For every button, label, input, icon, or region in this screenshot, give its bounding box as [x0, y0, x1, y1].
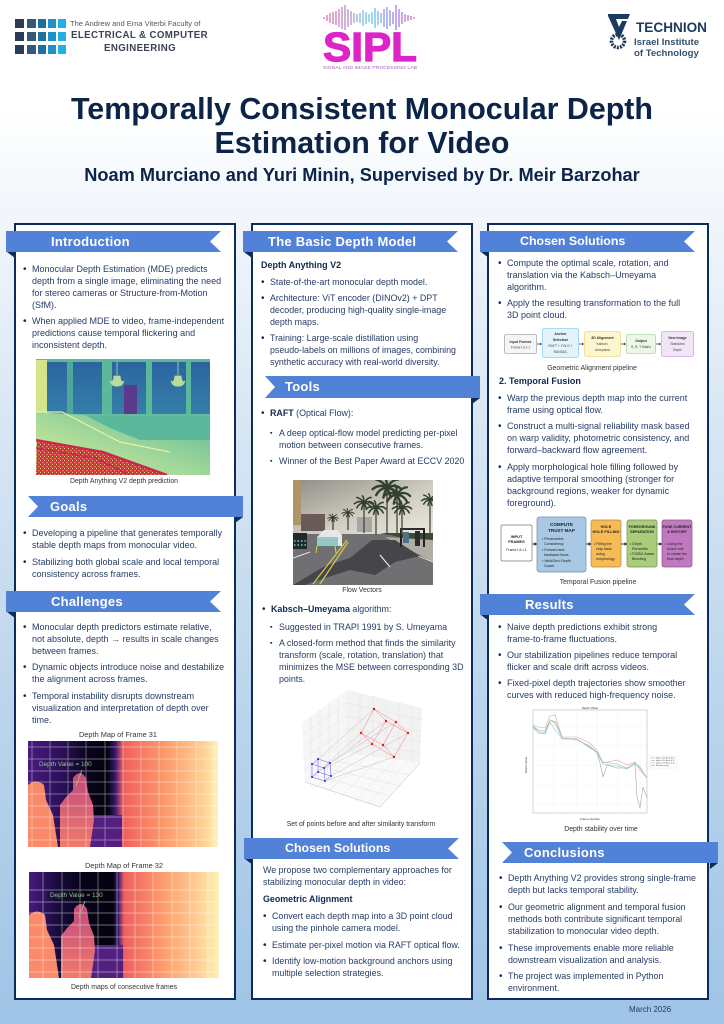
text: depth anything bullet 3: pseudo-labels on millions of images, combining	[270, 345, 456, 355]
caption: frame 32: Depth Map of Frame 32	[85, 861, 163, 870]
heading: conclusions: Conclusions	[524, 845, 605, 860]
diagram: temporal fusion pipeline: TRUST MAP	[548, 528, 575, 533]
image: depth anything prediction	[36, 359, 210, 475]
text: alignment bullet 1: Compute the optimal scale, rotation, and	[507, 258, 669, 268]
text: geometric alignment bullet 1	[272, 911, 453, 935]
diagram: temporal fusion pipeline: map back	[596, 547, 612, 551]
diagram: temporal fusion pipeline: • Valid/Zero Depth	[542, 559, 571, 563]
text: kabsch sub-bullet 2: A closed-form method that finds the similarity	[279, 638, 456, 648]
logo: electrical and computer engineering faculty	[15, 19, 208, 54]
fold: chosen solutions middle ribbon	[245, 859, 251, 864]
diagram: geometric alignment pipeline: Anchor	[554, 332, 567, 336]
text: raft sub-bullet 1: A deep optical-flow model predicting per-pixel	[279, 428, 458, 438]
logo: Technion: Israel Institute	[634, 37, 699, 48]
diagram: geometric alignment pipeline: Kabsch-	[596, 342, 609, 346]
caption: temporal fusion pipeline: Temporal Fusion pipeline	[560, 579, 636, 586]
text: challenges bullet 3	[32, 691, 209, 727]
diagram: temporal fusion pipeline: • Filling the	[594, 542, 612, 546]
text: results bullet 2: flicker and scale drift across videos.	[507, 662, 649, 672]
text: introduction bullet 1: for stereo cameras or Structure-from-Motion	[32, 288, 208, 298]
text: introduction bullet 2: predictions cause temporal flickering and	[32, 328, 195, 338]
text: conclusions bullet 2: methods both contribute significant temporal	[508, 914, 682, 924]
caption: depth stability: Depth stability over time	[564, 826, 638, 833]
text: challenges bullet 2: Dynamic objects introduce noise and destabilize	[32, 662, 224, 672]
text: temporal fusion bullet 3: foreground).	[507, 498, 556, 508]
fold: goals ribbon	[236, 517, 243, 522]
fold: introduction ribbon	[7, 252, 14, 258]
text: depth anything bullet 2	[270, 293, 446, 329]
diagram: geometric alignment pipeline: S, R, T Matrix	[631, 345, 651, 349]
text: kabsch sub-bullet 2	[279, 638, 464, 686]
heading: chosen solutions right	[480, 231, 695, 252]
text: goals bullet 2: consistency across frames.	[32, 569, 141, 579]
chart: depth stability line chart	[524, 706, 678, 821]
text: geometric alignment bullet 2: Estimate per-pixel motion via RAFT optical flow.	[272, 940, 460, 950]
text: geometric alignment bullet 1: Convert each depth map into a 3D point cloud	[272, 911, 453, 921]
heading: goals	[28, 496, 243, 517]
heading: the basic depth model: The Basic Depth Model	[268, 234, 416, 249]
text: challenges bullet 3: Temporal instability disrupts downstream	[32, 691, 194, 701]
diagram: temporal fusion pipeline: INPUT	[511, 534, 523, 539]
heading: tools	[265, 376, 480, 398]
text: kabsch sub-bullet 2: minimizes the MSE between corresponding 3D	[279, 662, 464, 672]
text: conclusions bullet 1	[508, 873, 696, 897]
text: depth anything bullet 3	[270, 333, 456, 369]
text: chosen solutions intro: We propose two complementary approaches for	[263, 865, 452, 875]
title: Temporally Consistent Monocular Depth	[71, 92, 653, 126]
diagram: geometric alignment pipeline: RAFT + YOLO +	[548, 344, 573, 348]
text: temporal fusion bullet 1	[507, 393, 687, 417]
text: geometric alignment bullet 3	[272, 956, 453, 980]
diagram: temporal fusion pipeline: backward flows	[544, 553, 569, 557]
text: conclusions bullet 2	[508, 902, 686, 938]
image: depth map of frame 32	[29, 872, 219, 978]
text: depth anything bullet 2: Architecture: ViT encoder (DINOv2) + DPT	[270, 293, 438, 303]
text: conclusions bullet 3: These improvements enable more reliable	[508, 943, 674, 953]
logo: SIPL signal and image processing lab	[323, 5, 417, 70]
text: chosen solutions intro	[263, 865, 452, 887]
text: results bullet 3: Fixed-pixel depth trajectories show smoother	[507, 678, 686, 688]
caption: depth anything: Depth Anything V2 depth prediction	[70, 478, 178, 485]
text: depth anything bullet 2: decoder, producing high-quality single-image	[270, 305, 446, 315]
image: street scene with flow vectors	[293, 480, 433, 585]
subheading: depth anything v2: Depth Anything V2	[261, 260, 341, 270]
diagram: temporal fusion pipeline: FOREGROUND	[629, 525, 656, 529]
text: geometric alignment bullet 3: Identify low-motion background anchors using	[272, 956, 453, 966]
text: alignment bullet 2	[507, 298, 680, 322]
text: conclusions bullet 2: Our geometric alignment and temporal fusion	[508, 902, 686, 912]
text: results bullet 1: Naive depth predictions exhibit strong	[507, 622, 657, 632]
logo: electrical and computer engineering faculty: ELECTRICAL & COMPUTER	[71, 30, 208, 41]
diagram: geometric alignment pipeline: Output	[635, 339, 648, 343]
diagram: temporal fusion pipeline: • Forward and	[542, 548, 564, 552]
text: alignment bullet 1: algorithm.	[507, 282, 547, 292]
diagram: temporal fusion pipeline: Guard	[544, 564, 554, 568]
authors: Noam Murciano and Yuri Minin, Supervised by Dr. Meir Barzohar	[84, 165, 640, 185]
heading: the basic depth model	[243, 231, 458, 252]
text: conclusions bullet 4: environment.	[508, 983, 559, 993]
heading: chosen solutions middle	[244, 838, 459, 859]
diagram: temporal fusion pipeline: to create the	[667, 552, 687, 556]
heading: goals: Goals	[50, 499, 87, 514]
text: raft sub-bullet 1: motion between consecutive frames.	[279, 440, 423, 450]
logo: electrical and computer engineering faculty: ENGINEERING	[104, 43, 176, 54]
fold: challenges ribbon	[7, 612, 14, 618]
caption: flow vectors: Flow Vectors	[342, 587, 382, 594]
text: results bullet 3	[507, 678, 686, 702]
text: kabsch sub-bullet 2: points.	[279, 674, 305, 684]
title: Estimation for Video	[215, 126, 509, 160]
text: alignment bullet 1	[507, 258, 669, 294]
diagram: temporal fusion pipeline: Blending	[632, 557, 646, 561]
heading: conclusions	[502, 842, 718, 863]
text: temporal fusion bullet 2	[507, 421, 690, 457]
text: conclusions bullet 2: stabilization to monocular video depth.	[508, 926, 659, 936]
text: alignment bullet 2: 3D point cloud.	[507, 310, 567, 320]
text: temporal fusion bullet 2: Construct a multi-signal reliability mask based	[507, 421, 690, 431]
panel: middle column	[251, 223, 473, 1000]
chart: depth stability line chart: Depth Value	[524, 757, 528, 773]
text: challenges bullet 2: the alignment across frames.	[32, 674, 148, 684]
diagram: temporal fusion pipeline: FRAMES	[508, 539, 525, 544]
text: goals bullet 1	[32, 528, 222, 552]
fold: basic depth model ribbon	[244, 252, 251, 258]
text: depth anything bullet 2: depth maps.	[270, 317, 319, 327]
fold: results ribbon	[481, 615, 487, 620]
diagram: temporal fusion pipeline: Percentile	[632, 547, 648, 551]
logo: SIPL signal and image processing lab: SIPL	[323, 24, 417, 70]
text: depth anything bullet 3: synthetic accuracy with real-world diversity.	[270, 357, 440, 367]
diagram: geometric alignment pipeline: Input Frames	[510, 340, 532, 344]
text: challenges bullet 1: not absolute, depth → results in scale changes	[32, 634, 219, 644]
text: introduction bullet 2: When applied MDE to video, frame-independent	[32, 316, 224, 326]
diagram: geometric alignment pipeline	[504, 328, 694, 358]
text: results bullet 1: frame-to-frame fluctuations.	[507, 634, 617, 644]
text: conclusions bullet 4: The project was implemented in Python	[508, 971, 663, 981]
heading: results: Results	[525, 597, 574, 612]
diagram: temporal fusion pipeline: Frame t & t-1	[506, 548, 527, 552]
panel: right column	[487, 223, 709, 1000]
diagram: temporal fusion pipeline: morphology	[596, 557, 615, 561]
text: chosen solutions intro: stabilizing monocular depth in video:	[263, 877, 406, 887]
text: kabsch sub-bullet 2: transform (scale, rotation, translation) that	[279, 650, 443, 660]
text: challenges bullet 1: Monocular depth predictors estimate relative,	[32, 622, 212, 632]
chart: 3D similarity transform	[302, 690, 422, 808]
caption: geometric alignment pipeline: Geometric Alignment pipeline	[547, 365, 637, 372]
diagram: temporal fusion pipeline: SEPARATION	[630, 530, 654, 534]
heading: chosen solutions middle: Chosen Solutions	[285, 841, 390, 855]
text: introduction bullet 1	[32, 264, 221, 312]
text: temporal fusion bullet 3: adaptive temporal smoothing (stronger for	[507, 474, 674, 484]
diagram: geometric alignment pipeline: Umeyama	[595, 348, 610, 352]
text: temporal fusion bullet 1: frame using optical flow.	[507, 405, 603, 415]
text: raft sub-bullet 1	[279, 428, 458, 452]
text: introduction bullet 1: Monocular Depth Estimation (MDE) predicts	[32, 264, 208, 274]
diagram: temporal fusion pipeline: Consistency	[544, 542, 564, 546]
text: temporal fusion bullet 3: Apply morphological hole filling followed by	[507, 462, 678, 472]
chart: depth stability line chart: alpha 0.70 (beta 0.5)	[656, 762, 675, 765]
logo: Technion: TECHNION	[636, 20, 707, 35]
logo: Technion	[608, 14, 707, 59]
caption: consecutive frames: Depth maps of consecutive frames	[71, 984, 177, 991]
date: March 2026	[629, 1005, 671, 1014]
subheading: geometric alignment: Geometric Alignment	[263, 894, 352, 904]
caption: frame 31: Depth Map of Frame 31	[79, 730, 157, 739]
diagram: temporal fusion pipeline: fusion rule	[667, 547, 684, 551]
chart: depth stability line chart: Depth Value	[582, 706, 598, 710]
text: challenges bullet 2	[32, 662, 224, 686]
logo: SIPL signal and image processing lab: SIGNAL AND IMAGE PROCESSING LAB	[323, 65, 417, 70]
diagram: temporal fusion pipeline: • Using the	[665, 542, 682, 546]
chart: depth stability line chart: Baseline (raw)	[656, 765, 669, 767]
diagram: geometric alignment pipeline: RANSAC	[554, 350, 568, 354]
image: depth map of frame 31	[28, 741, 218, 847]
logo: electrical and computer engineering faculty: The Andrew and Erna Viterbi Faculty of	[70, 19, 200, 28]
diagram: temporal fusion pipeline	[500, 516, 692, 572]
image: depth map of frame 32: Depth Value = 130	[50, 892, 103, 899]
text: kabsch sub-bullet 1: Suggested in TRAPI 1991 by S. Umeyama	[279, 622, 447, 632]
diagram: temporal fusion pipeline: FUSE CURRENT	[663, 525, 692, 529]
text: raft sub-bullet 2: Winner of the Best Paper Award at ECCV 2020	[279, 456, 464, 466]
text: depth anything bullet 1: State-of-the-art monocular depth model.	[270, 277, 427, 287]
diagram: temporal fusion pipeline: HOLE	[601, 524, 612, 529]
text: raft bullet: RAFT (Optical Flow):	[270, 408, 353, 418]
heading: introduction	[6, 231, 221, 252]
diagram: geometric alignment pipeline: Selection	[553, 338, 568, 342]
text: challenges bullet 3: time.	[32, 715, 52, 725]
text: alignment bullet 1: translation via the Kabsch–Umeyama	[507, 270, 656, 280]
text: conclusions bullet 3: downstream visualization and analysis.	[508, 955, 661, 965]
diagram: geometric alignment pipeline: New Image	[668, 336, 687, 340]
heading: results	[480, 594, 695, 615]
text: temporal fusion bullet 2: on warp validity, photometric consistency, and	[507, 433, 689, 443]
caption: similarity transform: Set of points before and after similarity transform	[287, 821, 435, 828]
chart: depth stability line chart: alpha 0.30 (beta 0.5)	[656, 757, 675, 760]
diagram: geometric alignment pipeline: Depth	[673, 348, 682, 352]
subheading: temporal fusion: 2. Temporal Fusion	[499, 376, 581, 386]
diagram: geometric alignment pipeline: Stabilized	[670, 342, 685, 346]
diagram: temporal fusion pipeline: COMPUTE	[550, 522, 573, 527]
text: alignment bullet 2: Apply the resulting transformation to the full	[507, 298, 680, 308]
panel: left column	[14, 223, 236, 1000]
text: results bullet 1	[507, 622, 657, 646]
text: conclusions bullet 3	[508, 943, 674, 967]
text: temporal fusion bullet 1: Warp the previous depth map into the current	[507, 393, 687, 403]
fold: conclusions ribbon	[710, 863, 718, 869]
text: challenges bullet 1	[32, 622, 219, 658]
diagram: geometric alignment pipeline: Frame t & t-1	[511, 346, 530, 350]
text: conclusions bullet 4	[508, 971, 663, 995]
text: introduction bullet 2	[32, 316, 224, 352]
diagram: temporal fusion pipeline: final depth	[667, 557, 684, 561]
diagram: geometric alignment pipeline: 3D Alignment	[591, 336, 615, 340]
text: depth anything bullet 3: Training: Large-scale distillation using	[270, 333, 418, 343]
fold: chosen solutions right ribbon	[481, 252, 487, 256]
text: introduction bullet 1: depth from a single image, eliminating the need	[32, 276, 221, 286]
text: temporal fusion bullet 3	[507, 462, 678, 510]
text: challenges bullet 3: visualization and interpretation of depth over	[32, 703, 209, 713]
text: temporal fusion bullet 2: forward–backward flow agreement.	[507, 445, 647, 455]
diagram: temporal fusion pipeline: HOLE FILLING	[592, 529, 620, 534]
diagram: temporal fusion pipeline: using	[596, 552, 605, 556]
title	[71, 92, 653, 160]
logo: Technion: of Technology	[634, 48, 699, 59]
heading: challenges	[6, 591, 221, 612]
text: results bullet 2	[507, 650, 677, 674]
text: conclusions bullet 1: depth but lacks temporal stability.	[508, 885, 639, 895]
text: results bullet 2: Our stabilization pipelines reduce temporal	[507, 650, 677, 660]
text: goals bullet 1: stable depth maps from monocular video.	[32, 540, 197, 550]
text: conclusions bullet 1: Depth Anything V2 provides strong single-frame	[508, 873, 696, 883]
text: kabsch-umeyama bullet: Kabsch–Umeyama algorithm:	[271, 604, 391, 614]
heading: challenges: Challenges	[51, 594, 123, 609]
diagram: temporal fusion pipeline: • Photometric	[542, 537, 564, 541]
text: challenges bullet 1: between frames.	[32, 646, 99, 656]
diagram: temporal fusion pipeline: • FG/BG Aware	[630, 552, 654, 556]
text: geometric alignment bullet 1: using the pinhole camera model.	[272, 923, 400, 933]
text: goals bullet 2	[32, 557, 219, 581]
heading: introduction: Introduction	[51, 234, 130, 249]
text: temporal fusion bullet 3: background regions, weaker for dynamic	[507, 486, 669, 496]
heading: chosen solutions right: Chosen Solutions	[520, 234, 625, 248]
text: introduction bullet 1: (SfM).	[32, 300, 56, 310]
image: depth map of frame 31: Depth Value = 100	[39, 761, 92, 768]
text: results bullet 3: curves with reduced high-frequency noise.	[507, 690, 676, 700]
diagram: temporal fusion pipeline: & HISTORY	[667, 530, 687, 534]
heading: tools: Tools	[285, 379, 320, 394]
fold: tools ribbon	[473, 398, 480, 404]
text: goals bullet 1: Developing a pipeline that generates temporally	[32, 528, 222, 538]
chart: depth stability line chart: Frame Number	[580, 817, 600, 821]
text: goals bullet 2: Stabilizing both global scale and local temporal	[32, 557, 219, 567]
diagram: temporal fusion pipeline: • Depth	[630, 542, 642, 546]
chart: depth stability line chart: alpha 0.50 (beta 0.5)	[656, 759, 675, 762]
text: introduction bullet 2: inconsistent depth.	[32, 340, 107, 350]
text: geometric alignment bullet 3: multiple selection strategies.	[272, 968, 383, 978]
